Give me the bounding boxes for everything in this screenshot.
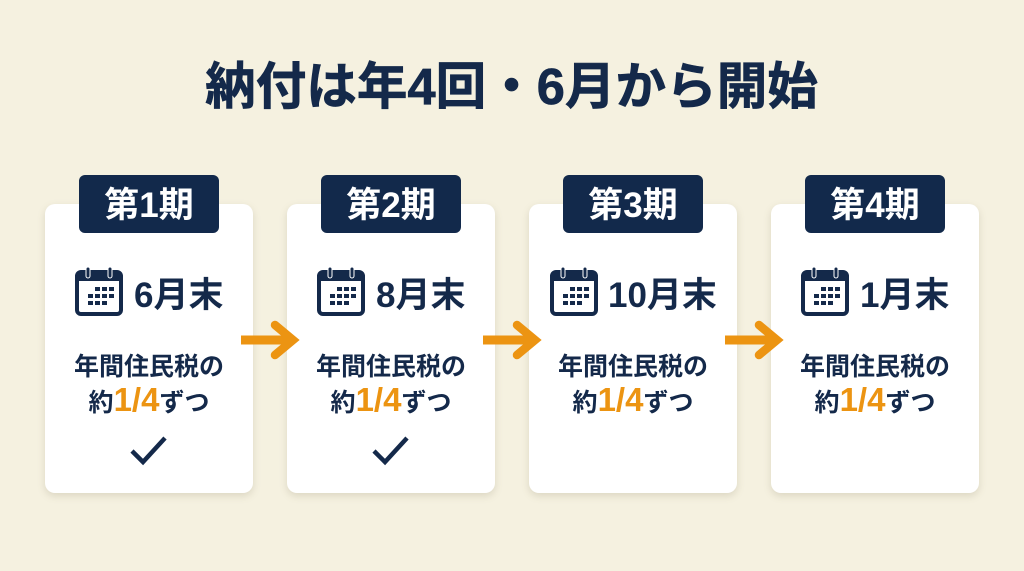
card 4 background: [771, 204, 979, 493]
badge: 第2期: 第2期: [346, 186, 436, 225]
panel: period 1: [42, 175, 256, 498]
badge: 第3期: [563, 175, 703, 233]
arrow 1: [241, 320, 300, 360]
badge: 第1期: [79, 175, 219, 233]
card 1 background: [45, 204, 253, 493]
card 3 background: [529, 204, 737, 493]
description line 2: 約1/4ずつ: [573, 381, 693, 418]
description line 1: 年間住民税の: [74, 353, 224, 381]
description line 2: 約1/4ずつ: [331, 381, 451, 418]
description line 2: 約1/4ずつ: [89, 381, 209, 418]
badge: 第2期: [321, 175, 461, 233]
icon: check mark: [130, 436, 167, 466]
panel: period 4: [768, 175, 982, 498]
due date: 8月末: [376, 276, 465, 315]
title: 納付は年4回・6月から開始: [205, 58, 818, 115]
card 2 background: [287, 204, 495, 493]
icon: calendar: [550, 268, 598, 316]
arrow 2: [483, 320, 542, 360]
arrow 3: [725, 320, 784, 360]
description line 1: 年間住民税の: [316, 353, 466, 381]
due date: 6月末: [134, 276, 223, 315]
badge: 第3期: 第3期: [588, 186, 678, 225]
icon: calendar: [75, 268, 123, 316]
description line 1: 年間住民税の: [800, 353, 950, 381]
badge: 第4期: [805, 175, 945, 233]
description line 2: 約1/4ずつ: [815, 381, 935, 418]
panel: period 2: [284, 175, 498, 498]
description line 1: 年間住民税の: [558, 353, 708, 381]
icon: calendar: [317, 268, 365, 316]
due date: 10月末: [608, 276, 717, 315]
badge: 第1期: 第1期: [104, 186, 194, 225]
badge: 第4期: 第4期: [830, 186, 920, 225]
panel: period 3: [526, 175, 740, 498]
due date: 1月末: [860, 276, 949, 315]
icon: check mark: [372, 436, 409, 466]
icon: calendar: [801, 268, 849, 316]
